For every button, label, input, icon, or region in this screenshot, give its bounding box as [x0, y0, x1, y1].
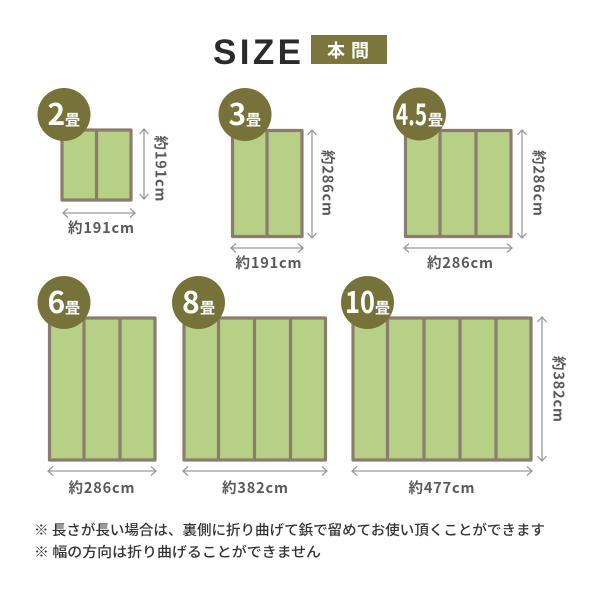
- mat layout: [232, 130, 302, 236]
- badge: 4.5畳: 4.5: [396, 92, 427, 134]
- panel: 10 tatami: [341, 276, 570, 498]
- badge: 4.5畳: [393, 88, 446, 140]
- badge: 3畳: 畳: [246, 109, 261, 130]
- width label: 約382cm: [222, 477, 288, 498]
- badge: 10畳: 10: [345, 278, 375, 322]
- height arrow: [140, 129, 148, 199]
- notes: [34, 520, 545, 562]
- badge: 10畳: 畳: [375, 297, 390, 318]
- width arrow: [404, 244, 512, 252]
- panel: 4.5 tatami: [393, 88, 550, 273]
- width label: 約191cm: [236, 252, 302, 273]
- width arrow: [63, 208, 135, 218]
- badge: 2畳: 2: [48, 90, 65, 134]
- height label: 約191cm: [150, 136, 172, 202]
- badge: 6畳: [38, 276, 90, 329]
- tag: 本間: [311, 35, 387, 64]
- height arrow: [308, 130, 316, 238]
- tag: 本間: 本間: [327, 37, 375, 63]
- badge: 3畳: 3: [228, 90, 246, 134]
- badge: 2畳: [38, 88, 90, 141]
- badge: 2畳: 畳: [65, 109, 80, 130]
- width arrow: [183, 466, 327, 476]
- mat layout: [406, 130, 511, 236]
- badge: 6畳: 畳: [65, 297, 80, 318]
- badge: 4.5畳: 畳: [428, 109, 443, 130]
- width arrow: [352, 466, 532, 476]
- panel: 6 tatami: [38, 276, 156, 498]
- badge: 10畳: [341, 276, 394, 329]
- title text: SIZE: SIZE: [213, 33, 301, 72]
- badge: 8畳: 畳: [200, 297, 215, 318]
- height label: 約286cm: [528, 150, 550, 216]
- width label: 約191cm: [68, 217, 134, 238]
- height arrow: [518, 130, 526, 238]
- height arrow: [538, 317, 546, 461]
- badge: 6畳: 6: [48, 278, 65, 322]
- note line 2: ※ 幅の方向は折り曲げることができません: [34, 542, 321, 562]
- badge: 8畳: [172, 276, 225, 329]
- width label: 約477cm: [408, 477, 474, 498]
- mat layout: [62, 130, 131, 200]
- mat layout: [353, 318, 531, 460]
- width arrow: [231, 244, 303, 252]
- title: [213, 33, 387, 72]
- mat layout: [184, 318, 326, 460]
- width label: 約286cm: [68, 477, 134, 498]
- height label: 約382cm: [548, 356, 570, 422]
- badge: 3畳: [218, 88, 272, 141]
- note line 1: ※ 長さが長い場合は、裏側に折り曲げて鋲で留めてお使い頂くことができます: [34, 520, 545, 540]
- mat layout: [50, 318, 155, 460]
- height label: 約286cm: [318, 150, 338, 216]
- width label: 約286cm: [427, 252, 493, 273]
- panel: 2 tatami: [38, 88, 172, 238]
- panel: 8 tatami: [172, 276, 327, 498]
- width arrow: [48, 466, 156, 476]
- badge: 8畳: 8: [182, 278, 200, 322]
- panel: 3 tatami: [218, 88, 338, 273]
